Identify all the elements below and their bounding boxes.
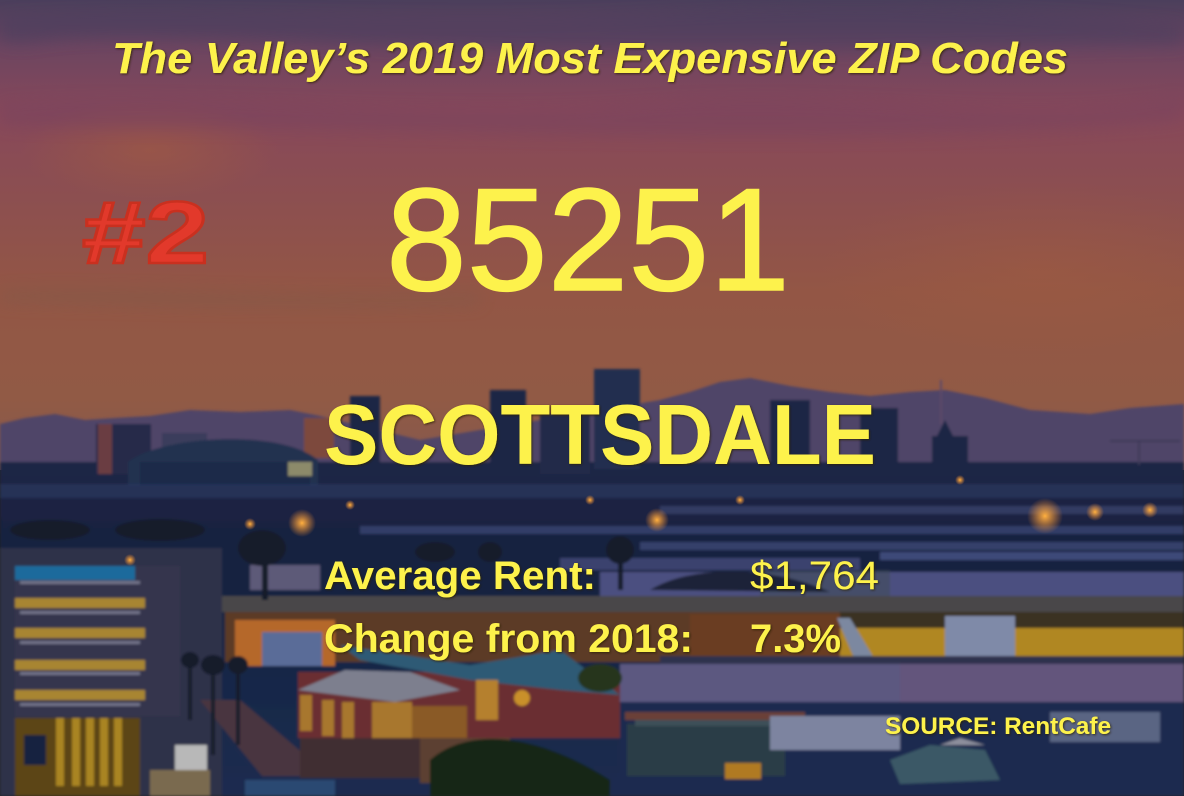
skyline buildings [96,369,1180,474]
apron [620,664,1184,702]
palms [10,519,634,755]
source note: SOURCE: RentCafe [885,713,1111,740]
rank badge: #2 [82,183,209,282]
change value: 7.3% [750,617,841,661]
parking garage [0,548,222,796]
city name: SCOTTSDALE [324,388,876,483]
mountains [0,378,1184,480]
average rent label: Average Rent: [324,554,596,598]
terminal [225,612,1184,662]
road [200,700,330,776]
stadium [128,439,318,486]
stats block [324,554,879,661]
horizon bands [660,506,1184,514]
title: The Valley’s 2019 Most Expensive ZIP Codes [112,35,1068,83]
change label: Change from 2018: [324,617,693,661]
ground [0,462,1184,796]
average rent value: $1,764 [750,554,879,598]
terminal roof [220,596,1184,612]
city lights [124,475,1158,566]
low building [298,645,620,783]
ZIP code: 85251 [386,158,790,321]
